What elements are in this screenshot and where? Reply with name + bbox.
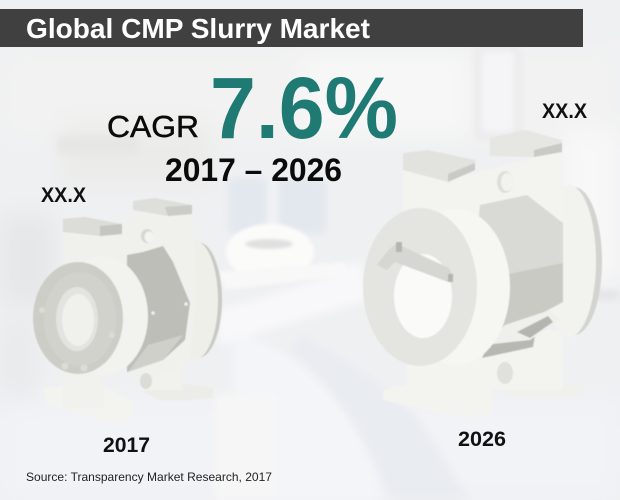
forecast period: 2017 – 2026 bbox=[165, 152, 342, 188]
2026 year label: 2026 bbox=[458, 428, 506, 451]
2026 value label: XX.X bbox=[542, 100, 587, 123]
title: Global CMP Slurry Market bbox=[26, 13, 370, 44]
2017 value label: XX.X bbox=[41, 184, 86, 207]
icon: small pump 2017 bbox=[33, 198, 222, 424]
CAGR value: 7.6% bbox=[210, 60, 398, 157]
2017 year label: 2017 bbox=[103, 434, 150, 457]
CAGR label: CAGR bbox=[107, 109, 199, 144]
icon: large pump 2026 bbox=[363, 130, 602, 418]
source note: Source: Transparency Market Research, 2017 bbox=[26, 470, 272, 484]
title bar bbox=[0, 9, 583, 47]
